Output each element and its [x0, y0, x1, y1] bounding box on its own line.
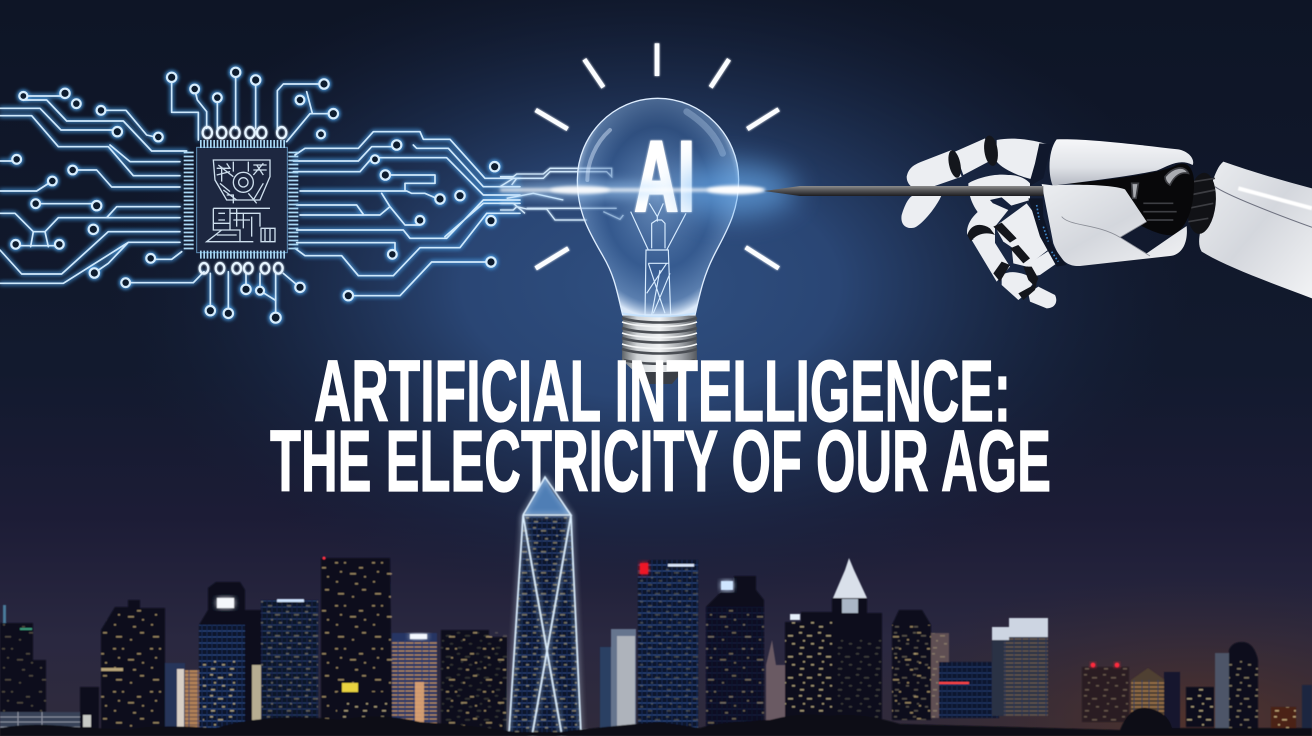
circuit band — [1028, 198, 1067, 267]
wrist joint — [1185, 171, 1219, 235]
eastern low rise district — [1082, 642, 1312, 731]
stylus tip — [764, 186, 880, 196]
circuit traces — [0, 68, 520, 323]
city skyline at night — [0, 477, 1312, 736]
forearm — [1199, 162, 1312, 298]
upper hand shell — [1050, 139, 1193, 186]
bulb glass, filament and AI letters — [577, 98, 739, 316]
left district towers — [0, 582, 261, 736]
microchip — [189, 127, 293, 274]
index finger — [907, 135, 1052, 190]
traces and light beam entering the bulb — [500, 168, 623, 220]
title — [270, 343, 1051, 510]
lower fingers — [967, 197, 1057, 308]
label: AI: AI — [635, 121, 695, 232]
central towers — [261, 556, 507, 736]
thumb — [901, 195, 942, 228]
bulb screw base — [622, 315, 697, 384]
glowing light bulb — [577, 98, 739, 384]
radiating light rays — [536, 43, 779, 268]
black mechanical joint — [1067, 164, 1194, 235]
circuit board traces and microchip — [0, 68, 520, 323]
stylus rod — [880, 186, 1043, 196]
palm behind stylus — [968, 175, 1030, 215]
tree line — [0, 708, 1312, 736]
lower hand shell — [1042, 184, 1187, 266]
filament — [631, 203, 686, 315]
glass spire tower — [509, 477, 581, 736]
chip schematic engraving — [207, 160, 275, 242]
robotic hand holding a stylus — [880, 135, 1312, 308]
light beam and flare — [495, 164, 795, 216]
midtown towers — [600, 558, 1048, 736]
